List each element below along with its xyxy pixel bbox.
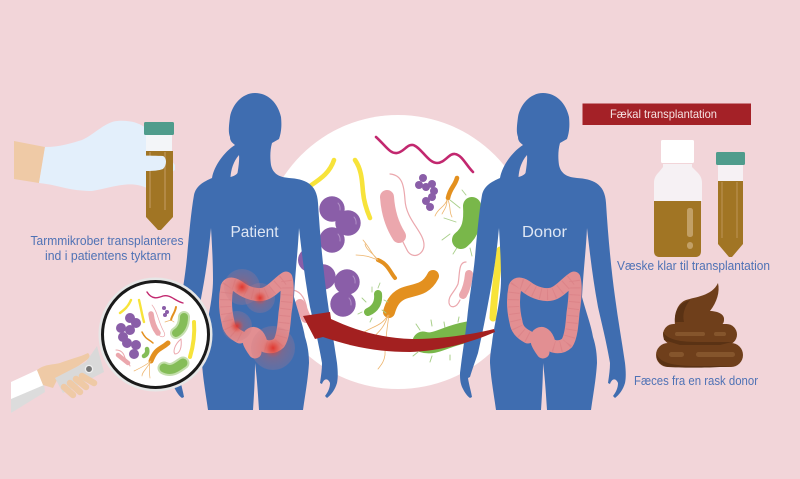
hand with magnifying glass	[11, 346, 104, 413]
feces pile	[656, 283, 743, 368]
patient silhouette	[172, 93, 338, 410]
microbe: small orange flagellate	[435, 178, 457, 217]
bottle	[654, 140, 702, 257]
handle button	[85, 365, 93, 373]
wrist	[14, 141, 45, 183]
microbes group	[291, 137, 500, 369]
sleeve	[11, 370, 44, 413]
white microbe circle	[261, 115, 535, 389]
microbe: small purple cluster	[415, 174, 438, 211]
microbe: green hairy bean upper	[442, 190, 480, 256]
caption: tube	[30, 233, 184, 263]
caption: feces: Fæces fra en rask donor	[634, 373, 759, 388]
microbe: pink bacterium left	[291, 290, 307, 318]
donor colon	[514, 278, 575, 352]
glove	[39, 121, 175, 191]
test tube	[144, 122, 174, 230]
fingers	[64, 376, 94, 395]
caption: tube: Tarmmikrober transplanteres	[30, 233, 184, 248]
microbe: pink bacterium	[387, 174, 424, 255]
mini microbes	[116, 292, 194, 378]
palm	[37, 353, 90, 388]
microbe: magenta spiral	[376, 137, 473, 172]
hand holding test tube	[14, 121, 175, 230]
patient colon	[226, 278, 287, 352]
sleeve shadow	[11, 385, 45, 413]
microbe: pink bacterium right	[449, 262, 469, 307]
magnifier lens	[98, 278, 212, 392]
microbe: large orange flagellate	[350, 276, 433, 369]
caption: liquid: Væske klar til transplantation	[617, 258, 770, 273]
microbe: small green bean	[358, 283, 388, 322]
label: Donor: Donor	[522, 224, 568, 241]
handle	[55, 346, 104, 393]
microbe: purple cocci	[298, 196, 361, 317]
glove thumb	[122, 156, 166, 171]
banner: Fækal transplantation	[582, 104, 751, 125]
microbe: tiny orange flagellate	[356, 240, 395, 278]
microbe: large green bean	[408, 312, 470, 362]
red transfer arrow	[303, 312, 495, 352]
microbe: yellow rods	[310, 160, 500, 318]
caption: tube: ind i patientens tyktarm	[45, 248, 171, 263]
sample tube	[716, 152, 745, 257]
banner: Fækal transplantation: Fækal transplantation	[610, 107, 717, 121]
label: Patient: Patient	[230, 224, 279, 241]
inflammation spots	[222, 269, 295, 370]
donor silhouette	[460, 93, 626, 410]
